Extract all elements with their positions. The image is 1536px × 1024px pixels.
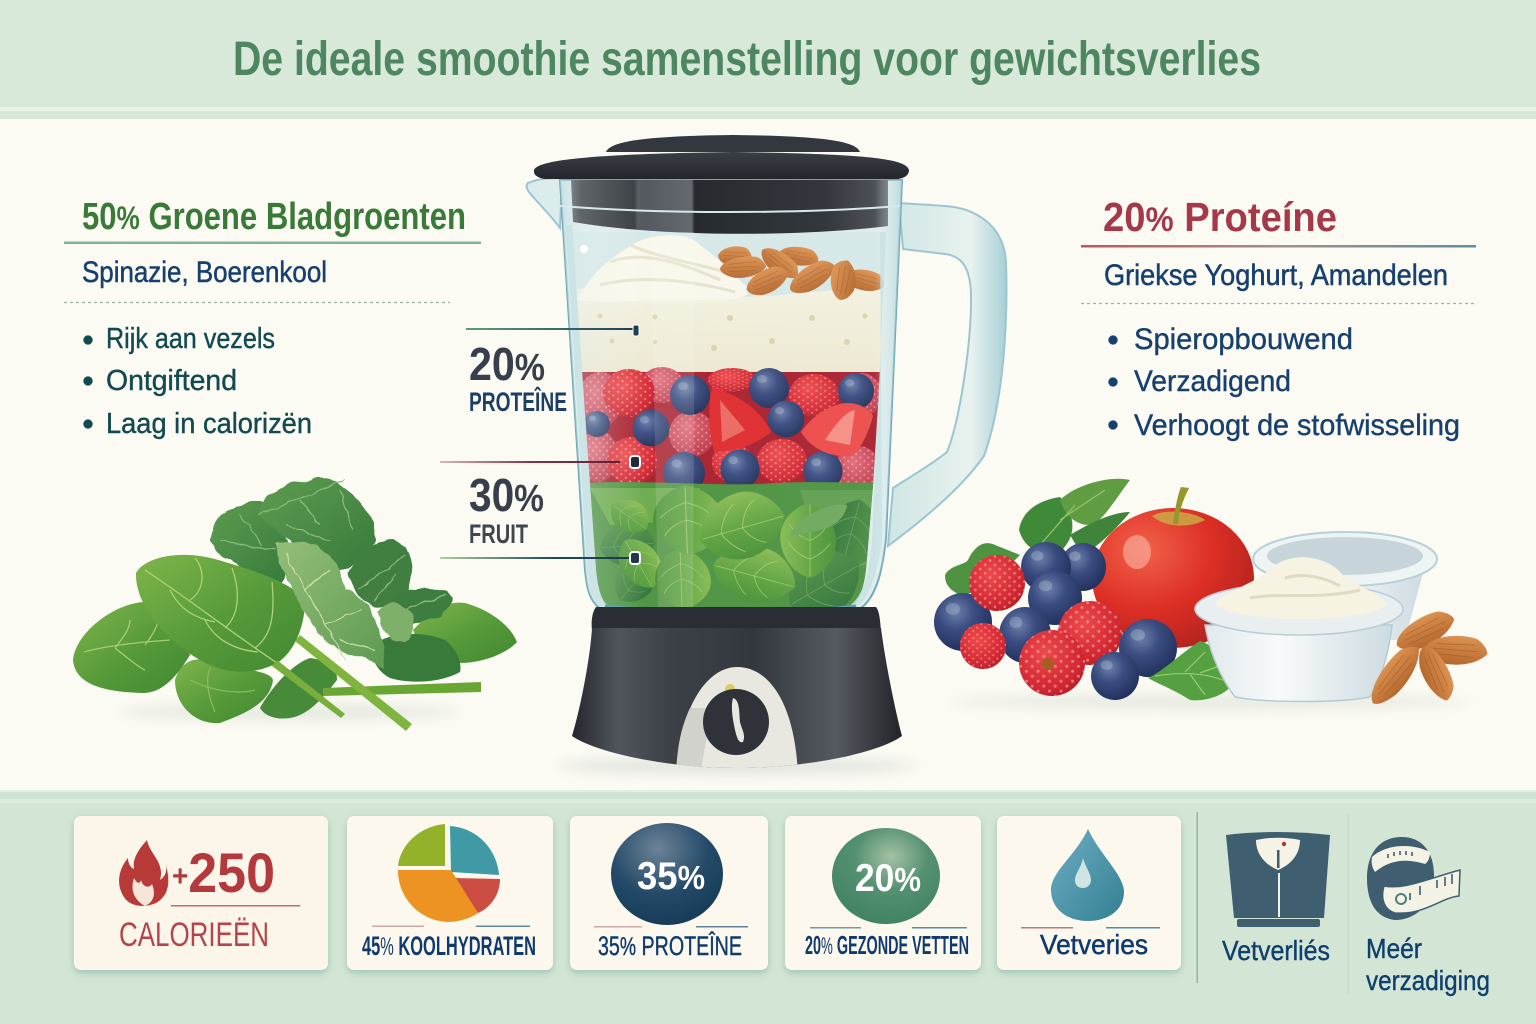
- blender lid: [534, 135, 909, 179]
- icon: water drop: [1051, 829, 1124, 921]
- lid collar: [571, 180, 888, 234]
- stat value: 250: [188, 841, 275, 904]
- big spinach leaf: [136, 555, 305, 672]
- benefit label: Vetverliés: [1222, 935, 1330, 966]
- light kale leaves: [275, 541, 413, 668]
- yoghurt bowls: [1195, 532, 1437, 702]
- benefit: weight loss: [1222, 832, 1330, 966]
- benefit label: [1366, 933, 1490, 996]
- glass reflections: [560, 180, 902, 612]
- label: proteine: PROTEÎNE: [469, 386, 567, 417]
- stat label: 35% PROTEÎNE: [598, 930, 742, 961]
- subheading: griekse yoghurt, amandelen: Griekse Yoghurt, Amandelen: [1104, 259, 1448, 292]
- layer: fruit: [582, 367, 880, 490]
- benefit label: Meér: [1366, 933, 1422, 964]
- flat stem: [323, 682, 481, 696]
- panel: groene bladgroenten: [64, 196, 481, 440]
- bullet list left: Ontgiftend: [106, 365, 237, 397]
- illustration: spinach and kale: [73, 479, 517, 731]
- icon: fat circle: 20%: [855, 857, 921, 900]
- icon: scale: [1226, 832, 1330, 927]
- bullet list right: Spieropbouwend: [1134, 323, 1353, 356]
- bullet list left: Rijk aan vezels: [106, 323, 275, 355]
- icon: fat circle: [832, 828, 940, 924]
- berries: [934, 542, 1177, 700]
- label: fruit: FRUIT: [469, 519, 528, 549]
- stat card: protein: [570, 816, 768, 970]
- icon: flame: [119, 840, 168, 906]
- bullet list right: Verzadigend: [1134, 365, 1291, 398]
- label: 20%: 20%: [469, 338, 545, 390]
- callout: 30% fruit: [440, 456, 640, 549]
- benefit: satiety: [1366, 837, 1490, 996]
- pie chart: [398, 824, 500, 922]
- stat value: +: [172, 860, 188, 893]
- heading: 20% proteine: 20% Proteíne: [1103, 194, 1337, 240]
- callout: 50% greens: [440, 552, 640, 564]
- kale bunch: [210, 479, 452, 623]
- stat label: CALORIEËN: [119, 916, 269, 954]
- bullet list right: Verhoogt de stofwisseling: [1134, 409, 1460, 442]
- benefit label: verzadiging: [1366, 965, 1490, 996]
- layer: almonds: [718, 246, 884, 300]
- label: 30%: 30%: [469, 469, 544, 521]
- stems: [272, 660, 345, 718]
- title: De ideale smoothie samenstelling voor gewichtsverlies: [233, 33, 1261, 86]
- illustration: fruit, yoghurt and almonds: [934, 479, 1489, 711]
- stat label: 20% GEZONDE VETTEN: [805, 930, 969, 960]
- heading: 50% groene bladgroenten: 50% Groene Bladgroenten: [82, 196, 466, 238]
- bullet list right: [1108, 323, 1460, 442]
- jar contents: [576, 235, 884, 607]
- leaf near bowl: [1148, 641, 1234, 700]
- icon: measuring tape: [1367, 837, 1460, 920]
- illustration: blender: [527, 135, 1006, 775]
- bullet list left: [84, 323, 312, 440]
- layer: spinach: [590, 482, 874, 607]
- small spinach leaf: [260, 658, 337, 719]
- callout: 20% proteine: [466, 325, 639, 417]
- dark spinach leaf: [370, 634, 460, 682]
- panel: proteine: [1081, 194, 1476, 442]
- icon: protein circle: 35%: [637, 855, 705, 898]
- bottom spinach leaf: [175, 659, 273, 723]
- almonds: [1361, 606, 1489, 711]
- leaves behind berries: [945, 479, 1130, 595]
- left spinach leaf: [73, 602, 190, 693]
- stat card: calories: [74, 816, 328, 970]
- stat card: carbohydrates: [347, 816, 553, 970]
- right spinach leaf: [413, 603, 517, 663]
- blender base: [572, 607, 902, 775]
- apple: [1092, 487, 1254, 648]
- jar back and spout: [527, 178, 562, 228]
- bullet list left: Laag in calorizën: [106, 408, 312, 440]
- layer: yoghurt: [576, 235, 884, 372]
- icon: protein circle: [611, 823, 723, 925]
- stat card: healthy fats: [785, 816, 981, 970]
- stat label: Vetveries: [1040, 929, 1148, 960]
- stat card: fat burning: [997, 816, 1181, 970]
- control dial: [676, 667, 798, 775]
- blender handle: [888, 203, 1006, 546]
- stat label: 45% KOOLHYDRATEN: [362, 931, 536, 961]
- subheading: spinazie, boerenkool: Spinazie, Boerenkool: [82, 256, 327, 289]
